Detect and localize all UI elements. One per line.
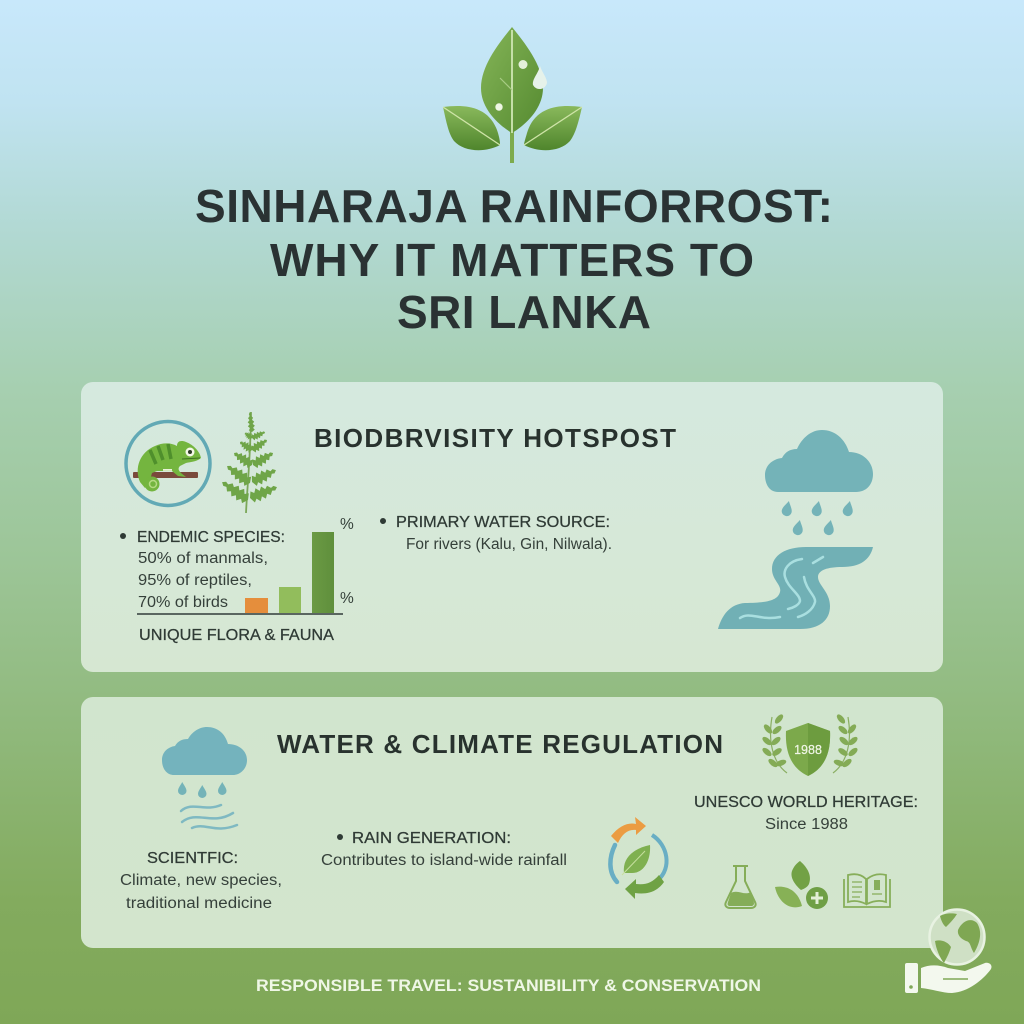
text: rain generation [321,830,567,869]
text: endemic species: 70% of birds [138,594,228,611]
text: scientific: traditional medicine [126,895,272,912]
icon: unesco shield with laurels [761,713,859,776]
icon: three leaves with water drop [443,27,582,163]
bar chart: % [340,516,354,533]
text: primary water source: For rivers (Kalu, Gin, Nilwala). [406,536,612,553]
bar chart: % [340,590,354,607]
caption: unique flora and fauna: UNIQUE FLORA & FAUNA [139,627,334,644]
text: rain generation: Contributes to island-wide rainfall [321,852,567,869]
title: SINHARAJA RAINFORROST: [195,180,833,232]
heading: water and climate regulation: WATER & CLIMATE REGULATION [277,729,723,759]
icon: flask [725,866,756,908]
icon: unesco shield with laurels: 1988 [794,743,822,757]
text: endemic species: ENDEMIC SPECIES: [137,529,285,546]
icon: hand holding globe [905,910,992,993]
title: SRI LANKA [397,286,651,338]
panel: water and climate regulation [81,697,943,948]
panel: biodiversity hotspot [81,382,943,672]
icon: open book [844,874,890,907]
title: WHY IT MATTERS TO [270,234,754,286]
text: scientific [120,850,282,912]
text: endemic species: 95% of reptiles, [138,572,252,589]
title [195,180,833,338]
icon: chameleon in circle [126,422,210,506]
text: endemic species: 50% of manmals, [138,550,268,567]
text: unesco world heritage: UNESCO WORLD HERITAGE: [694,794,918,811]
icon: medicinal leaves with plus [775,861,828,909]
text: endemic species [120,529,285,611]
text: unesco world heritage [694,794,918,833]
icon: rain cloud and river [718,430,873,629]
icon: water cycle arrows with leaf [610,817,667,899]
footer text: RESPONSIBLE TRAVEL: SUSTANIBILITY & CONSERVATION [256,977,761,995]
icon: rain cloud with waves [162,727,247,828]
text: primary water source: PRIMARY WATER SOURCE: [396,514,610,531]
bar chart [137,516,354,615]
icon: fern [218,412,280,513]
text: rain generation: RAIN GENERATION: [352,830,511,847]
heading: biodiversity hotspot: BIODBRVISITY HOTSPOST [314,423,676,453]
text: unesco world heritage: Since 1988 [765,816,848,833]
text: scientific: SCIENTFIC: [147,850,238,867]
text: scientific: Climate, new species, [120,872,282,889]
text: primary water source [380,514,612,553]
